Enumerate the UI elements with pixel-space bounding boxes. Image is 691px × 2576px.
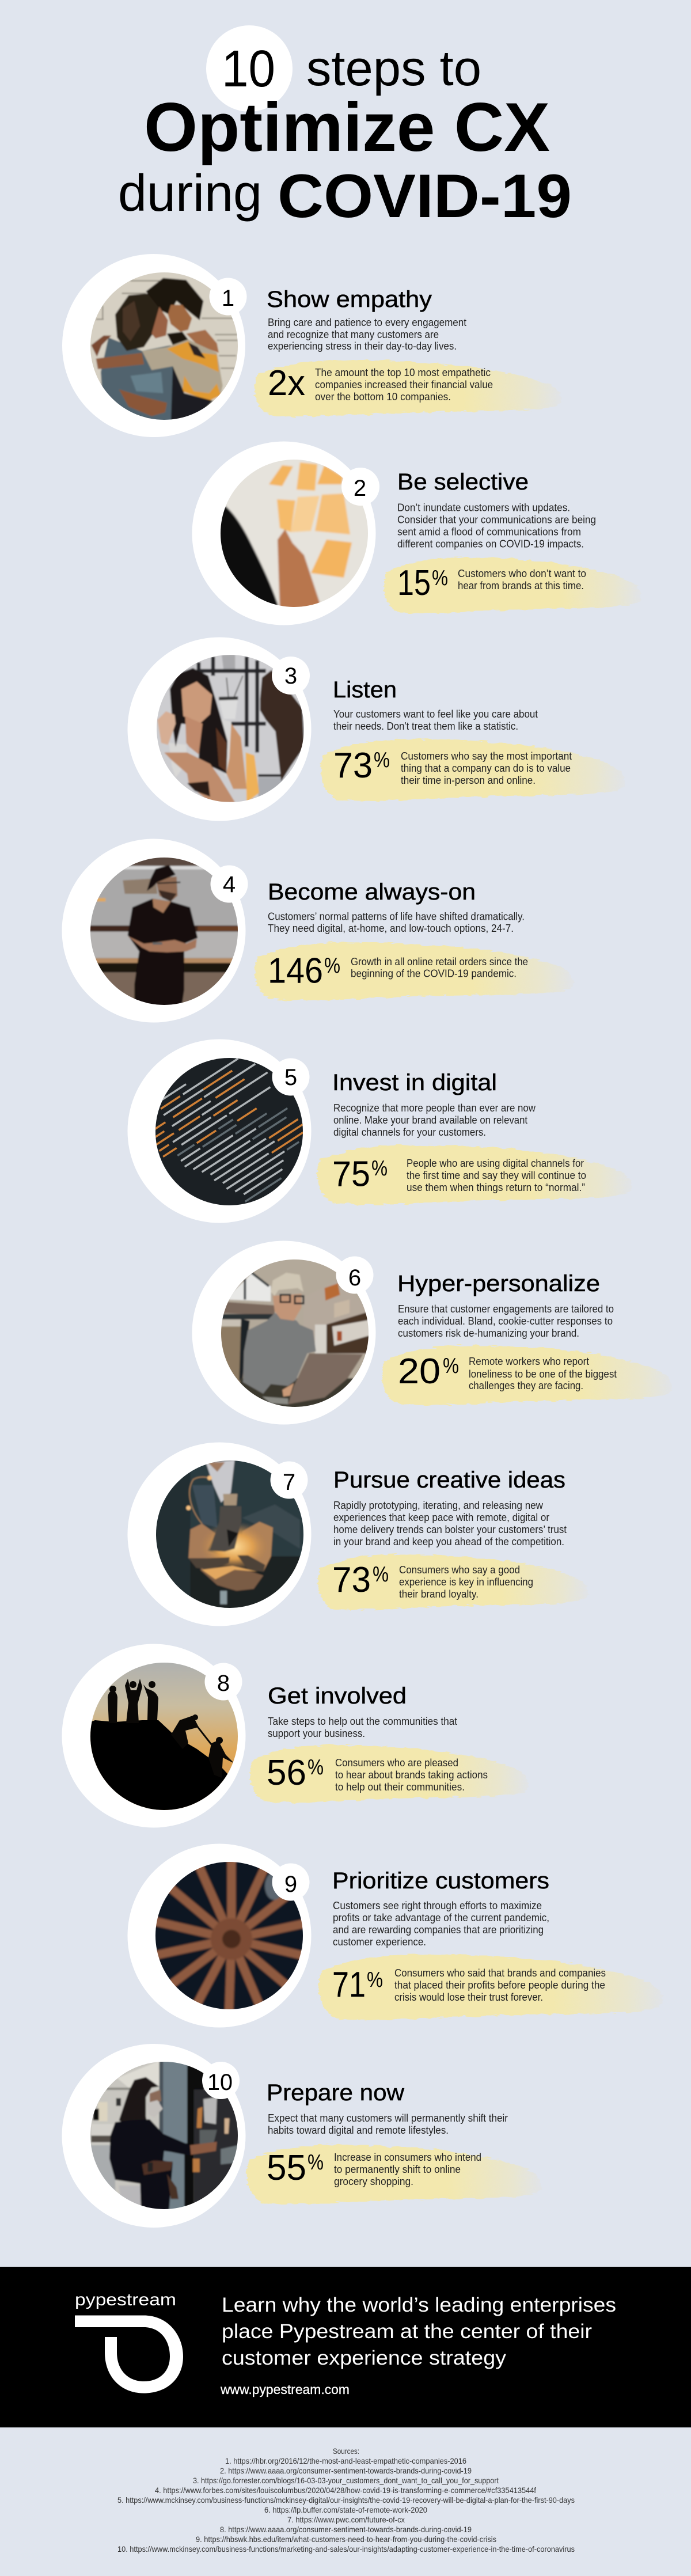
body text: customers risk de-humanizing your brand. [398, 1327, 579, 1339]
body text [333, 1500, 567, 1547]
photo: code on a dark screen [155, 1058, 303, 1205]
sources list: 5. https://www.mckinsey.com/business-functions/mckinsey-digital/our-insights/the-covid-19-recovery-will-be-digital-a-plan-for-the-first-90-days [117, 2495, 575, 2505]
number badge 9 [272, 1864, 310, 1900]
stat callout: % [367, 1968, 383, 1992]
body text: Consider that your communications are being [397, 514, 596, 525]
body text: their needs. Don't treat them like a statistic. [333, 720, 518, 732]
sources list: 6. https://lp.buffer.com/state-of-remote-work-2020 [264, 2505, 427, 2514]
title: COVID-19 [278, 161, 572, 230]
body text: Rapidly prototyping, iterating, and releasing new [333, 1500, 544, 1511]
body text: sent amid a flood of communications from [397, 526, 581, 538]
call to action text: place Pypestream at the center of their [222, 2320, 592, 2343]
heading: Be selective [397, 469, 529, 495]
body text: different companies on COVID-19 impacts. [397, 538, 584, 549]
body text: Recognize that more people than ever are now [333, 1102, 536, 1114]
number badge 3 [272, 657, 310, 695]
heading: Listen [333, 677, 397, 703]
stat callout: to hear about brands taking actions [335, 1769, 488, 1781]
stat callout: loneliness to be one of the biggest [469, 1368, 617, 1380]
body text: Ensure that customer engagements are tailored to [398, 1303, 614, 1315]
number badge 5 [272, 1059, 310, 1095]
photo: masked woman shopping [86, 2059, 242, 2213]
body text: experiences that keep pace with remote, digital or [333, 1512, 549, 1523]
panel: step 9 prioritize customers [128, 1844, 663, 2034]
stat callout: crisis would lose their trust forever. [394, 1991, 543, 2003]
number badge 8: 8 [217, 1671, 230, 1696]
body text [268, 317, 466, 352]
stat callout: Growth in all online retail orders since the [351, 956, 528, 968]
body text: online. Make your brand available on relevant [333, 1114, 527, 1126]
title: Optimize CX [144, 89, 550, 166]
stat callout: % [371, 1156, 388, 1181]
body text: Customers see right through efforts to maximize [333, 1900, 542, 1911]
number badge 7: 7 [283, 1470, 295, 1495]
body text [397, 502, 596, 549]
number badge 10: 10 [207, 2070, 233, 2095]
body text: customer experience. [333, 1936, 426, 1948]
body text: digital channels for your customers. [333, 1126, 486, 1138]
number badge 10 [202, 2062, 240, 2099]
stat callout: % [374, 748, 390, 772]
panel: step 5 invest in digital [128, 1039, 632, 1226]
body text: profits or take advantage of the current pandemic, [333, 1912, 549, 1924]
body text: and recognize that many customers are [268, 329, 439, 340]
body text: each individual. Bland, cookie-cutter responses to [398, 1315, 613, 1327]
stat callout: 56 [267, 1753, 306, 1793]
title [118, 25, 572, 230]
stat callout: Consumers who said that brands and companies [394, 1967, 606, 1979]
panel: step 1 show empathy [62, 254, 561, 437]
body text: Don’t inundate customers with updates. [397, 502, 570, 514]
panel: step 6 hyper-personalize [192, 1240, 672, 1425]
sources list: 4. https://www.forbes.com/sites/louiscolumbus/2020/04/28/how-covid-19-is-transforming-e-commerce/#cf335413544f [155, 2486, 536, 2495]
heading: Get involved [268, 1683, 407, 1709]
body text: Bring care and patience to every engagement [268, 317, 466, 328]
photo: man in black with phone [90, 858, 238, 1005]
body text: Your customers want to feel like you care about [333, 708, 538, 720]
heading: Invest in digital [332, 1070, 497, 1095]
stat callout: 55 [267, 2148, 306, 2188]
stat callout: their time in-person and online. [401, 775, 536, 786]
photo: two women talking [157, 655, 304, 802]
sources list: 10. https://www.mckinsey.com/business-functions/marketing-and-sales/our-insights/adapting-customer-experience-in-the-time-of-coronavirus [117, 2544, 575, 2554]
stat callout [246, 2145, 542, 2204]
photo: circle of joined hands [155, 1862, 303, 2009]
logo: pypestream wordmark and mark [75, 2290, 183, 2393]
number badge 2: 2 [354, 476, 366, 501]
call to action text: Learn why the world’s leading enterprises [222, 2294, 616, 2316]
number badge 2 [341, 468, 379, 506]
stat callout [384, 557, 641, 613]
stat callout [318, 1954, 663, 2020]
stat callout: 2x [268, 363, 305, 403]
body text [333, 1102, 536, 1138]
number badge 1: 1 [222, 286, 234, 311]
number badge 7 [271, 1462, 307, 1498]
number badge 8 [205, 1663, 242, 1700]
body text: home delivery trends can bolster your customers’ trust [333, 1524, 567, 1535]
stat callout [318, 1554, 588, 1610]
photo: two women embracing [90, 272, 238, 420]
photo: silhouettes climbing at sunset [88, 1660, 241, 1813]
number badge 9: 9 [284, 1872, 297, 1897]
stat callout [250, 1745, 529, 1803]
stat callout: beginning of the COVID-19 pandemic. [351, 968, 517, 979]
number badge 4 [211, 865, 248, 903]
stat callout: to permanently shift to online [334, 2164, 461, 2175]
stat callout: % [432, 566, 448, 590]
call to action text [222, 2294, 616, 2369]
stat callout [255, 942, 574, 1000]
number badge 3: 3 [284, 663, 297, 689]
stat callout: Consumers who say a good [399, 1564, 520, 1576]
number badge 4: 4 [223, 872, 236, 897]
body text: Take steps to help out the communities that [268, 1716, 457, 1727]
stat callout: their brand loyalty. [399, 1588, 479, 1600]
panel: step 8 get involved [62, 1644, 529, 1828]
panel: step 7 pursue creative ideas [128, 1442, 588, 1626]
stat callout [255, 360, 561, 416]
stat callout: use them when things return to “normal.” [407, 1182, 585, 1193]
sources list [117, 2446, 575, 2554]
stat callout [317, 1145, 632, 1205]
stat callout: % [307, 1755, 324, 1780]
sources list: 8. https://www.aaaa.org/consumer-sentiment-towards-brands-during-covid-19 [220, 2525, 472, 2534]
number badge 1 [210, 278, 246, 316]
stat callout: Customers who say the most important [401, 750, 572, 762]
stat callout: to help out their communities. [335, 1781, 465, 1793]
stat callout [382, 1345, 672, 1405]
stat callout: 146 [268, 951, 323, 991]
stat callout: challenges they are facing. [469, 1380, 583, 1391]
footer banner [0, 2267, 691, 2427]
title: 10 [222, 40, 275, 98]
body text: and are rewarding companies that are prioritizing [333, 1924, 544, 1936]
stat callout: The amount the top 10 most empathetic [315, 367, 491, 378]
stat callout: 73 [333, 746, 373, 786]
number badge 6: 6 [348, 1265, 361, 1291]
stat callout: Consumers who are pleased [335, 1757, 458, 1769]
logo: pypestream wordmark and mark: pypestream [75, 2290, 176, 2309]
body text: in your brand and keep you ahead of the competition. [333, 1536, 564, 1547]
stat callout: % [324, 954, 340, 978]
sources list: Sources: [333, 2446, 359, 2456]
photo: hands holding glowing bulb [156, 1460, 303, 1608]
body text: Expect that many customers will permanently shift their [268, 2112, 508, 2124]
body text [333, 1900, 549, 1948]
sources list: 7. https://www.pwc.com/future-of-cx [287, 2515, 405, 2524]
body text: habits toward digital and remote lifestyles. [268, 2124, 449, 2136]
body text [333, 708, 538, 732]
stat callout: Remote workers who report [469, 1356, 589, 1367]
panel: step 10 prepare now [62, 2044, 542, 2228]
stat callout: Customers who don’t want to [458, 568, 586, 579]
photo: woman at laptop [221, 1259, 369, 1407]
number badge 5: 5 [284, 1065, 297, 1090]
body text: support your business. [268, 1728, 365, 1739]
stat callout: hear from brands at this time. [458, 580, 584, 591]
sources list: 2. https://www.aaaa.org/consumer-sentiment-towards-brands-during-covid-19 [220, 2466, 472, 2475]
heading: Show empathy [267, 287, 432, 312]
call to action text: customer experience strategy [222, 2347, 507, 2369]
stat callout: 71 [332, 1965, 366, 2005]
body text [268, 1716, 457, 1739]
website link text: www.pypestream.com [220, 2382, 350, 2397]
stat callout: Increase in consumers who intend [334, 2152, 481, 2163]
title: during [118, 165, 262, 222]
body text: experiencing stress in their day-to-day lives. [268, 340, 457, 352]
body text [268, 911, 525, 934]
heading: Become always-on [268, 879, 476, 905]
stat callout: over the bottom 10 companies. [315, 391, 451, 403]
title: steps to [306, 41, 481, 96]
body text [268, 2112, 508, 2136]
stat callout: 15 [397, 563, 431, 603]
heading: Prioritize customers [332, 1868, 549, 1894]
sources list: 3. https://go.forrester.com/blogs/16-03-03-your_customers_dont_want_to_call_you_for_support [193, 2476, 499, 2485]
stat callout: % [373, 1562, 389, 1587]
photo: sticky notes on wall [218, 457, 371, 610]
sources list: 9. https://hbswk.hbs.edu/item/what-customers-need-to-hear-from-you-during-the-covid-crisis [196, 2535, 496, 2544]
stat callout: 20 [398, 1352, 441, 1391]
heading: Prepare now [267, 2080, 404, 2105]
body text: Customers’ normal patterns of life have shifted dramatically. [268, 911, 525, 923]
panel: step 2 be selective [192, 441, 641, 625]
stat callout: % [307, 2150, 324, 2175]
stat callout [321, 739, 625, 801]
stat callout: 73 [332, 1560, 371, 1600]
stat callout: companies increased their financial value [315, 379, 493, 390]
stat callout: People who are using digital channels for [407, 1158, 584, 1169]
heading: Pursue creative ideas [333, 1467, 565, 1493]
stat callout: % [443, 1354, 459, 1378]
stat callout: grocery shopping. [334, 2176, 413, 2187]
stat callout: that placed their profits before people during the [394, 1979, 605, 1991]
sources list: 1. https://hbr.org/2016/12/the-most-and-least-empathetic-companies-2016 [225, 2456, 466, 2465]
body text: They need digital, at-home, and low-touch options, 24-7. [268, 923, 514, 934]
panel: step 4 become always-on [62, 839, 574, 1023]
body text [398, 1303, 614, 1339]
heading: Hyper-personalize [397, 1271, 600, 1296]
number badge 6 [336, 1257, 373, 1293]
stat callout: thing that a company can do is to value [401, 762, 571, 774]
panel: step 3 listen [128, 637, 625, 821]
stat callout: the first time and say they will continue to [407, 1170, 586, 1181]
stat callout: experience is key in influencing [399, 1576, 533, 1588]
stat callout: 75 [332, 1154, 370, 1194]
